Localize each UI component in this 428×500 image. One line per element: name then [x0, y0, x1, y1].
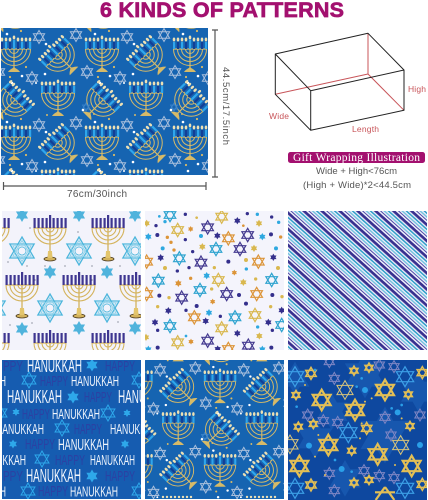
label: high: High — [408, 84, 426, 94]
happy words: HAPPY — [38, 483, 68, 500]
happy words: HAPPY — [74, 421, 102, 438]
background blotches — [281, 352, 428, 497]
label: wide: Wide — [269, 111, 289, 121]
happy words: PPY — [3, 358, 23, 375]
orange outline stars — [141, 232, 264, 356]
hanukkah words: HANUKKAH — [7, 387, 62, 407]
happy words: PPY — [3, 468, 23, 485]
hanukkah words — [2, 360, 141, 496]
thin gold outline stars — [282, 381, 409, 454]
panel: gold stars on dark blue — [288, 360, 427, 500]
hanukkah words: HANUKKAH — [110, 421, 158, 438]
formula: wide plus high: Wide + High<76cm — [316, 166, 397, 177]
solid stars — [9, 358, 130, 482]
blue outline stars — [153, 208, 287, 333]
hanukkah words: HANUKKAH — [26, 466, 81, 486]
purple outline stars — [302, 356, 425, 497]
panel: diagonal stripes — [288, 211, 427, 350]
panel: white menorah and star pattern — [2, 211, 141, 350]
hanukkah words: HANUKKAH — [71, 373, 119, 390]
label: length: Length — [352, 124, 379, 134]
happy words: HAPPY — [25, 436, 55, 453]
dimension: width label: 76cm/30inch — [67, 189, 127, 200]
diagram: gift box — [275, 33, 404, 130]
hanukkah words: HANUKKAH — [27, 356, 82, 376]
panel: small menorah pattern — [145, 360, 284, 499]
bright blue accents — [295, 369, 423, 473]
hanukkah words: HANUKKAH — [70, 484, 118, 500]
solid gold stars — [143, 220, 263, 341]
solid orange stars — [175, 226, 237, 345]
menorah row 3 — [2, 330, 125, 350]
happy words — [3, 358, 135, 500]
solid navy stars — [152, 217, 285, 353]
dimension: height label: 44.5cm/17.5inch — [220, 67, 231, 145]
medium gold stars — [292, 363, 428, 491]
big gold stars — [290, 380, 421, 500]
happy words: HAPPY — [84, 389, 112, 406]
hanukkah words: HANUKKAH — [52, 406, 100, 423]
solid light blue stars — [145, 233, 266, 353]
happy words: HAPPY — [55, 452, 85, 469]
panel: happy hanukkah lettering — [2, 360, 141, 499]
happy words: HAPPY — [22, 406, 50, 423]
small solid stars — [16, 208, 141, 336]
heading pill: gift wrapping illustration: Gift Wrapping Illustration — [293, 152, 420, 164]
dots — [154, 212, 284, 350]
panel: large menorah pattern sample — [1, 28, 208, 175]
menorah row 2 — [6, 272, 153, 318]
menorah row 1 — [0, 215, 125, 261]
dimension: width line — [4, 182, 206, 190]
gold outline stars — [172, 210, 261, 349]
outline stars — [0, 372, 146, 499]
happy words: HAPPY — [105, 468, 135, 485]
happy words: HAPPY — [105, 358, 135, 375]
happy words: HAPPY — [40, 373, 68, 390]
blue outline stars — [286, 367, 414, 498]
big stars — [0, 237, 147, 322]
hanukkah words: HANUKKAH — [118, 387, 173, 407]
formula: high plus wide times two: (High + Wide)*2<44.5cm — [303, 180, 411, 191]
panel: multicolour star pattern — [145, 211, 284, 350]
dimension: height line — [212, 30, 218, 177]
purple outline stars — [176, 221, 254, 352]
hanukkah words: HANUKKAH — [90, 452, 135, 469]
gold accents — [304, 384, 403, 476]
hanukkah words: HANUKKAH — [58, 437, 109, 454]
